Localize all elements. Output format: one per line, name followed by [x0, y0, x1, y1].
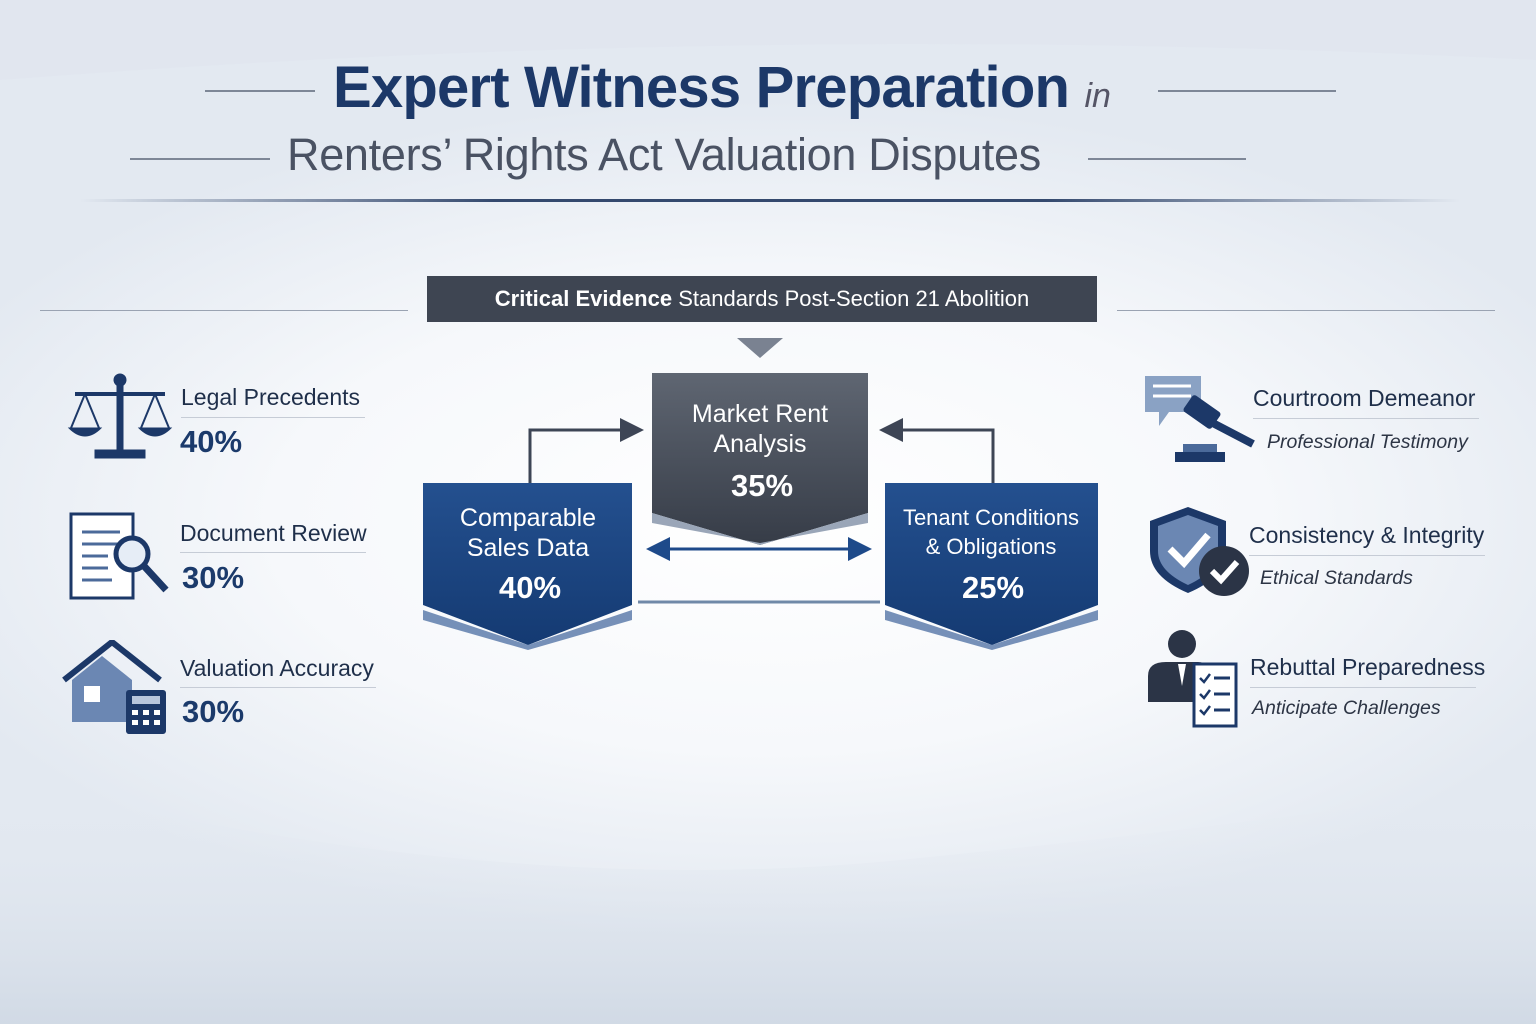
right item: courtroom demeanor: Professional Testimony	[1267, 431, 1468, 453]
right item: courtroom demeanor	[1145, 376, 1479, 462]
left item: legal precedents: 40%	[180, 424, 242, 459]
banner	[427, 276, 1097, 322]
flow diagram: 25%	[962, 570, 1024, 605]
left item: document review	[70, 512, 367, 600]
title: Expert Witness Preparation in	[333, 55, 1111, 120]
flow diagram: Comparable	[460, 504, 596, 532]
left item: valuation accuracy: Valuation Accuracy	[180, 655, 374, 681]
flow diagram: 40%	[499, 570, 561, 605]
title	[130, 55, 1336, 180]
title: Renters’ Rights Act Valuation Disputes	[287, 129, 1041, 180]
flow diagram: & Obligations	[926, 534, 1056, 559]
right item: consistency & integrity: Ethical Standards	[1260, 567, 1413, 589]
flow diagram: Market Rent	[692, 400, 828, 428]
flow diagram	[423, 338, 1098, 650]
flow diagram: Analysis	[713, 430, 807, 458]
flow diagram: Sales Data	[467, 534, 589, 562]
right item: rebuttal preparedness	[1148, 630, 1485, 728]
left item: valuation accuracy: 30%	[182, 694, 244, 729]
right item: consistency & integrity	[1150, 507, 1485, 596]
arrows	[530, 430, 638, 483]
flow diagram: 35%	[731, 468, 793, 503]
right item: rebuttal preparedness: Anticipate Challenges	[1252, 697, 1441, 719]
right box	[885, 483, 1098, 645]
left item: document review: Document Review	[180, 520, 367, 546]
banner: Critical Evidence Standards Post-Section 21 Abolition	[495, 286, 1029, 311]
left item: legal precedents: Legal Precedents	[181, 384, 360, 410]
center box	[652, 373, 868, 545]
left item: document review: 30%	[182, 560, 244, 595]
right item: consistency & integrity: Consistency & Integrity	[1249, 522, 1484, 548]
flow diagram: Tenant Conditions	[903, 505, 1079, 530]
right item: rebuttal preparedness: Rebuttal Preparedness	[1250, 654, 1485, 680]
left item: valuation accuracy	[62, 640, 376, 734]
left item: legal precedents	[68, 374, 365, 459]
right item: courtroom demeanor: Courtroom Demeanor	[1253, 385, 1475, 411]
left box	[423, 483, 632, 645]
